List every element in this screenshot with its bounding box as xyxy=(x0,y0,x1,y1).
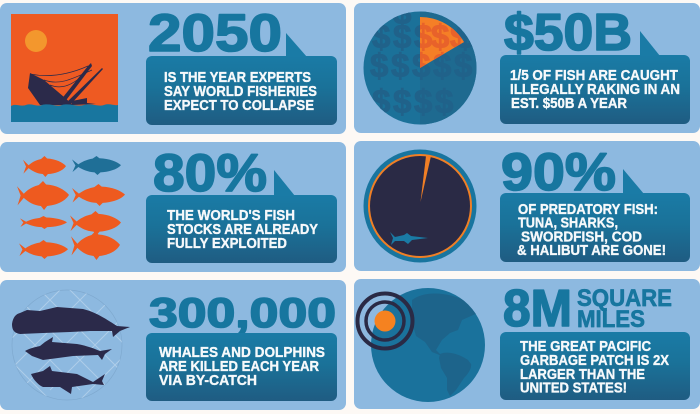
chart: pie of illegally caught fish with dollar signs: $ xyxy=(372,18,390,55)
callout: 300,000 text xyxy=(146,333,337,401)
big number: 80%: 80% xyxy=(153,144,267,203)
chart: pie of illegally caught fish with dollar signs xyxy=(364,0,476,124)
panel: 90% predatory fish xyxy=(354,141,700,271)
callout: 90% text: OF PREDATORY FISH: xyxy=(518,202,658,218)
icon: school of fish xyxy=(17,156,125,260)
chart: pie of illegally caught fish with dollar signs: $ xyxy=(393,83,411,120)
callout: garbage patch text: GARBAGE PATCH IS 2X xyxy=(520,353,669,369)
panel background xyxy=(354,279,700,409)
callout: garbage patch text: UNITED STATES! xyxy=(520,380,627,396)
chart: pie of illegally caught fish with dollar signs: $ xyxy=(372,83,390,120)
panel background xyxy=(0,3,346,134)
callout: 80% text xyxy=(146,170,337,263)
panel: 2050 collapse xyxy=(0,3,346,134)
icon: whales caught in net xyxy=(12,290,130,400)
icon: sinking ship at sunset xyxy=(11,14,118,122)
big number: 90%: 90% xyxy=(501,143,616,202)
panel background xyxy=(354,3,700,133)
chart: pie of illegally caught fish with dollar signs: $ xyxy=(433,47,451,84)
callout: 90% text xyxy=(500,169,690,262)
chart: pie of illegally caught fish with dollar signs: $ xyxy=(393,18,411,55)
callout: $50B text: EST. $50B A YEAR xyxy=(511,96,627,112)
chart: pie of illegally caught fish with dollar signs: $ xyxy=(435,83,453,120)
callout: 90% text: SWORDFISH, COD xyxy=(521,230,642,246)
callout: 80% text: FULLY EXPLOITED xyxy=(167,236,287,252)
big number: 300,000: 300,000 xyxy=(149,289,336,336)
callout: 2050 text: SAY WORLD FISHERIES xyxy=(164,84,317,100)
chart: pie of illegally caught fish with dollar signs: $ xyxy=(370,47,388,84)
chart: pie of illegally caught fish with dollar signs: $ xyxy=(414,83,432,120)
callout: garbage patch text: THE GREAT PACIFIC xyxy=(520,339,651,355)
callout: 80% text: THE WORLD'S FISH xyxy=(167,208,295,224)
panel: 8M square miles garbage patch xyxy=(354,279,700,409)
chart: pie of illegally caught fish with dollar signs: $ xyxy=(431,18,449,55)
callout: $50B text: ILLEGALLY RAKING IN AN xyxy=(510,82,680,98)
chart: pie of illegally caught fish with dollar signs: $ xyxy=(435,18,453,55)
callout: 300,000 text: ARE KILLED EACH YEAR xyxy=(159,359,319,375)
panel: 80% exploited xyxy=(0,142,346,272)
callout: garbage patch text xyxy=(500,332,690,400)
callout: 300,000 text: WHALES AND DOLPHINS xyxy=(159,345,325,361)
callout: 80% text: STOCKS ARE ALREADY xyxy=(167,222,318,238)
callout: $50B text: 1/5 OF FISH ARE CAUGHT xyxy=(510,68,678,84)
panel: 300,000 by-catch xyxy=(0,280,346,410)
big number: $50B: $50B xyxy=(504,4,632,62)
callout: 300,000 text: VIA BY-CATCH xyxy=(159,373,257,389)
icon: globe with garbage patch target xyxy=(358,288,485,402)
chart: pie of illegally caught fish with dollar signs: $ xyxy=(450,18,468,55)
big number: 8M: 8M xyxy=(503,280,572,338)
panel: $50B illegal fishing xyxy=(354,0,700,133)
chart: pie of illegally caught fish with dollar signs: $ xyxy=(414,18,432,55)
callout: 90% text: TUNA, SHARKS, xyxy=(518,216,618,232)
chart: pie of illegally caught fish with dollar signs: $ xyxy=(454,47,472,84)
chart: dark pie with thin orange slice and swordfish xyxy=(364,150,476,262)
chart: pie of illegally caught fish with dollar signs: $ xyxy=(433,47,451,84)
callout: 2050 text: IS THE YEAR EXPERTS xyxy=(164,70,311,86)
callout: garbage patch text: LARGER THAN THE xyxy=(520,367,645,383)
chart: pie of illegally caught fish with dollar signs: $ xyxy=(391,47,409,84)
callout: $50B text xyxy=(500,31,690,124)
panel background xyxy=(0,280,346,410)
panel background xyxy=(0,142,346,272)
callout: 90% text: & HALIBUT ARE GONE! xyxy=(517,243,666,259)
chart: pie of illegally caught fish with dollar signs: $ xyxy=(456,18,474,55)
heading: SQUARE: SQUARE xyxy=(577,285,672,312)
callout: 2050 text xyxy=(146,33,337,125)
big number: 2050: 2050 xyxy=(148,4,282,63)
chart: pie of illegally caught fish with dollar signs: $ xyxy=(414,18,432,55)
callout: 2050 text: EXPECT TO COLLAPSE xyxy=(164,98,314,114)
chart: pie of illegally caught fish with dollar signs: $ xyxy=(412,47,430,84)
heading: MILES: MILES xyxy=(577,306,645,333)
panel background xyxy=(354,141,700,271)
chart: pie of illegally caught fish with dollar signs: $ xyxy=(412,47,430,84)
